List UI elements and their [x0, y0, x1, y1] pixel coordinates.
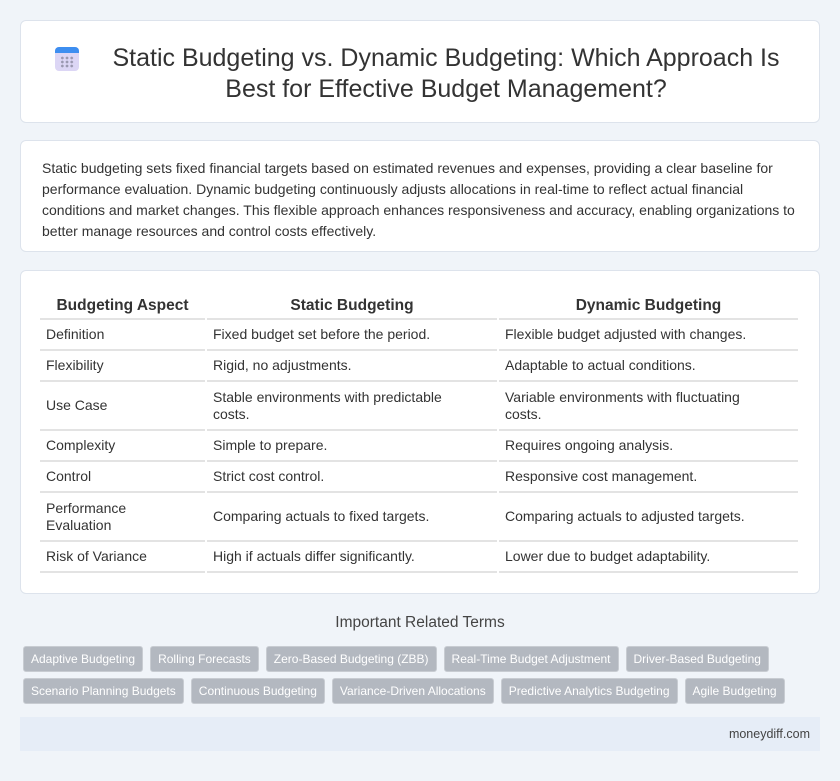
comparison table: Comparing actuals to fixed targets.: [213, 508, 429, 524]
tags: Real-Time Budget Adjustment: [452, 652, 611, 666]
comparison table: Dynamic Budgeting: [576, 296, 721, 314]
comparison table: Stable environments with predictable: [213, 388, 442, 404]
comparison table: Complexity: [46, 437, 115, 453]
tags: Scenario Planning Budgets: [31, 684, 176, 698]
footer: [20, 717, 820, 751]
tags: Agile Budgeting: [692, 684, 777, 698]
comparison table: Budgeting Aspect: [56, 296, 189, 314]
comparison table: High if actuals differ significantly.: [213, 548, 415, 564]
comparison table: Requires ongoing analysis.: [505, 437, 673, 453]
comparison table: Definition: [46, 326, 104, 342]
comparison table: Risk of Variance: [46, 548, 147, 564]
comparison table: Flexibility: [46, 357, 104, 373]
intro text: [20, 140, 820, 252]
tags: Adaptive Budgeting: [31, 652, 135, 666]
tags: Continuous Budgeting: [199, 684, 317, 698]
header card: [20, 20, 820, 123]
related terms heading: Important Related Terms: [335, 614, 505, 631]
comparison table: Strict cost control.: [213, 468, 324, 484]
comparison table: Control: [46, 468, 91, 484]
comparison table: Comparing actuals to adjusted targets.: [505, 508, 745, 524]
title: Static Budgeting vs. Dynamic Budgeting: Which Approach Is Best for Effective Budget Management?: [112, 44, 780, 103]
comparison table: Use Case: [46, 397, 107, 413]
comparison table: Evaluation: [46, 516, 111, 532]
tags: Driver-Based Budgeting: [634, 652, 761, 666]
tags: Variance-Driven Allocations: [340, 684, 486, 698]
comparison table: costs.: [213, 406, 250, 422]
tags: Predictive Analytics Budgeting: [509, 684, 670, 698]
comparison table: [20, 270, 820, 594]
intro text: Static budgeting sets fixed financial targets based on estimated revenues and expenses, providing a clear baseline for performance evaluation. Dynamic budgeting continuously adjusts allocations in real-time to reflect actual financial conditions and market changes. This flexible approach enhances responsiveness and accuracy, enabling organizations to better manage resources and control costs effectively.: [42, 160, 795, 239]
comparison table: Variable environments with fluctuating: [505, 388, 740, 404]
comparison table: Simple to prepare.: [213, 437, 327, 453]
comparison table: Performance: [46, 500, 126, 516]
comparison table: costs.: [505, 406, 542, 422]
tags: Rolling Forecasts: [158, 652, 251, 666]
comparison table: Lower due to budget adaptability.: [505, 548, 710, 564]
comparison table: Rigid, no adjustments.: [213, 357, 352, 373]
comparison table: Fixed budget set before the period.: [213, 326, 430, 342]
tags: Zero-Based Budgeting (ZBB): [274, 652, 429, 666]
footer: moneydiff.com: [729, 727, 810, 741]
comparison table: Static Budgeting: [290, 296, 414, 314]
comparison table: Flexible budget adjusted with changes.: [505, 326, 746, 342]
comparison table: Responsive cost management.: [505, 468, 697, 484]
comparison table: Adaptable to actual conditions.: [505, 357, 696, 373]
icon: calendar: [55, 47, 79, 71]
